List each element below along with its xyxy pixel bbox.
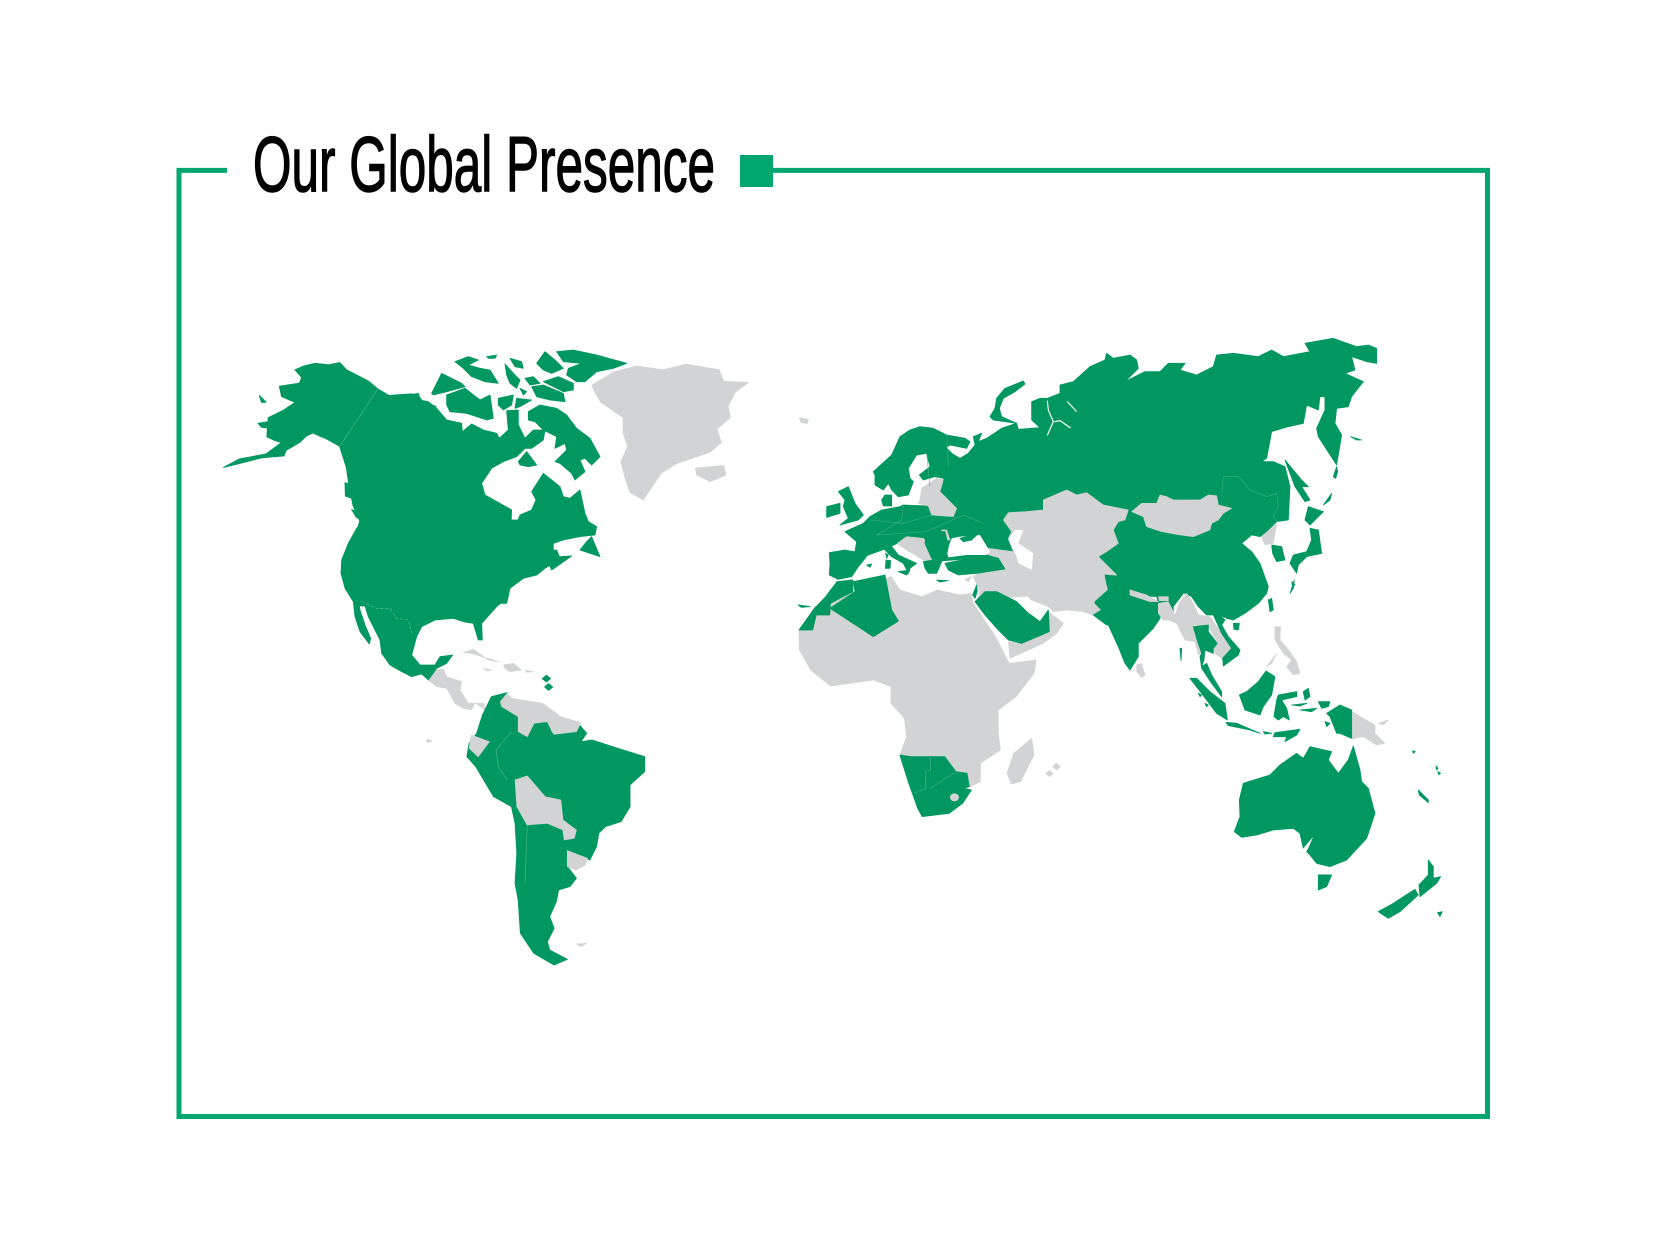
lesotho [950,793,959,801]
venezuela guyana, ecuador, bolivia paraguay, uruguay [469,693,587,870]
region: europe details and north africa [827,435,1005,637]
region: russia and china landmass [943,338,1377,620]
southern africa borders [913,757,956,793]
central america and caribbean islands [428,649,533,710]
gulf of ob and yenisei inlets [1047,401,1077,435]
russia and china [943,338,1377,620]
caspian sea [1008,530,1033,570]
title: Our Global Presence [253,120,715,208]
region: usa, mexico, central america, caribbean [341,520,553,710]
alaska canada border [340,389,378,446]
usa and mexico [341,520,553,680]
region: south america and southern africa [427,577,1061,965]
region: korea and japan [1222,437,1362,586]
green frame [179,170,1488,1116]
southern africa [900,755,971,817]
mexico border [362,602,412,633]
region: alaska, western canada, greenland [224,363,808,559]
european countries and north africa in green [827,487,1005,637]
australia, tasmania, new zealand, new caledonia [1234,746,1442,918]
belarus baltics, balkans, moldova, cyprus [897,478,972,582]
russia china border [1222,477,1278,522]
green square marker [740,155,773,187]
us canada border [400,524,548,570]
region: australia and new zealand [1234,746,1442,918]
europe mainland and scandinavia [845,427,1027,562]
region: eastern canada and arctic islands [400,350,627,603]
region: gray central asia and mongolia [973,490,1232,615]
kazakhstan to pakistan and middle east [973,490,1128,615]
africa, madagascar and small islands [427,577,1061,947]
region: europe [845,427,1027,562]
south america borders [496,732,527,883]
alaska and western canada [224,363,436,559]
region: southeast asia [1130,580,1388,745]
canada mainland and islands [400,350,627,603]
yemen and oman [1008,612,1145,677]
european borders [870,435,983,535]
mongolia [1132,495,1232,537]
morocco and western sahara [798,580,853,630]
south america [467,675,645,965]
south korea, japan, sakhalin, kurils [1272,437,1362,586]
spencer gulf [1303,837,1313,855]
region: india and arabia [975,575,1183,677]
black sea [947,535,990,557]
north korea [1262,523,1277,545]
thailand, vietnam, indonesia, taiwan, hainan [1180,580,1352,742]
saudi arabia and india [975,575,1183,670]
world map [224,338,1442,965]
gulf water [1022,597,1050,617]
greenland and iceland [592,364,808,500]
nepal, bhutan, myanmar laos cambodia, philippines, papua new guinea [1130,590,1388,745]
